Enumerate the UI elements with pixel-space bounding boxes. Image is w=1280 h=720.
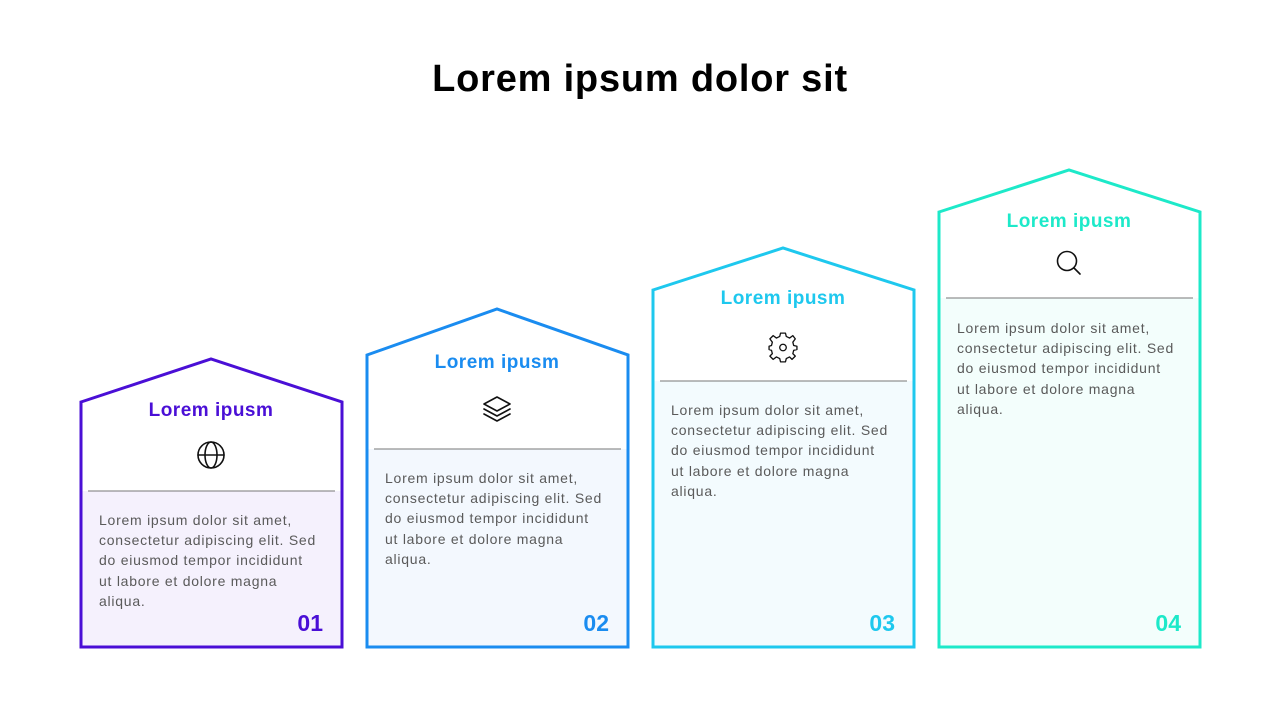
- body text 03: Lorem ipsum dolor sit amet,: [671, 402, 864, 418]
- number 02: 02: [583, 610, 609, 636]
- body text 01: do eiusmod tempor incididunt: [99, 552, 303, 568]
- body text 04: do eiusmod tempor incididunt: [957, 360, 1161, 376]
- icon: gear: [769, 333, 797, 362]
- icon: magnifier: [1058, 252, 1080, 274]
- icon: layers: [484, 397, 510, 421]
- body text 03: aliqua.: [671, 483, 718, 499]
- body text 04: aliqua.: [957, 401, 1004, 417]
- card 02: [367, 309, 628, 647]
- heading 01: Lorem ipusm: [149, 400, 273, 421]
- body text 03: do eiusmod tempor incididunt: [671, 442, 875, 458]
- heading 04: Lorem ipusm: [1007, 211, 1131, 232]
- heading 02: Lorem ipusm: [435, 352, 559, 373]
- body text 04: consectetur adipiscing elit. Sed: [957, 340, 1174, 356]
- body text 01: consectetur adipiscing elit. Sed: [99, 532, 316, 548]
- body text 02: do eiusmod tempor incididunt: [385, 510, 589, 526]
- card 03: [653, 248, 914, 647]
- body text 04: Lorem ipsum dolor sit amet,: [957, 320, 1150, 336]
- body text 01: ut labore et dolore magna: [99, 573, 277, 589]
- body text 02: Lorem ipsum dolor sit amet,: [385, 470, 578, 486]
- body text 03: ut labore et dolore magna: [671, 463, 849, 479]
- body text 04: ut labore et dolore magna: [957, 381, 1135, 397]
- heading 03: Lorem ipusm: [721, 288, 845, 309]
- body text 01: aliqua.: [99, 593, 146, 609]
- body text 02: consectetur adipiscing elit. Sed: [385, 490, 602, 506]
- body text 02: ut labore et dolore magna: [385, 531, 563, 547]
- icon: globe: [198, 442, 224, 468]
- card 04: [939, 170, 1200, 647]
- card 01: [81, 359, 342, 647]
- number 04: 04: [1155, 610, 1181, 636]
- number 03: 03: [869, 610, 895, 636]
- body text 02: aliqua.: [385, 551, 432, 567]
- number 01: 01: [297, 610, 323, 636]
- body text 03: consectetur adipiscing elit. Sed: [671, 422, 888, 438]
- body text 01: Lorem ipsum dolor sit amet,: [99, 512, 292, 528]
- title: Lorem ipsum dolor sit: [432, 58, 848, 100]
